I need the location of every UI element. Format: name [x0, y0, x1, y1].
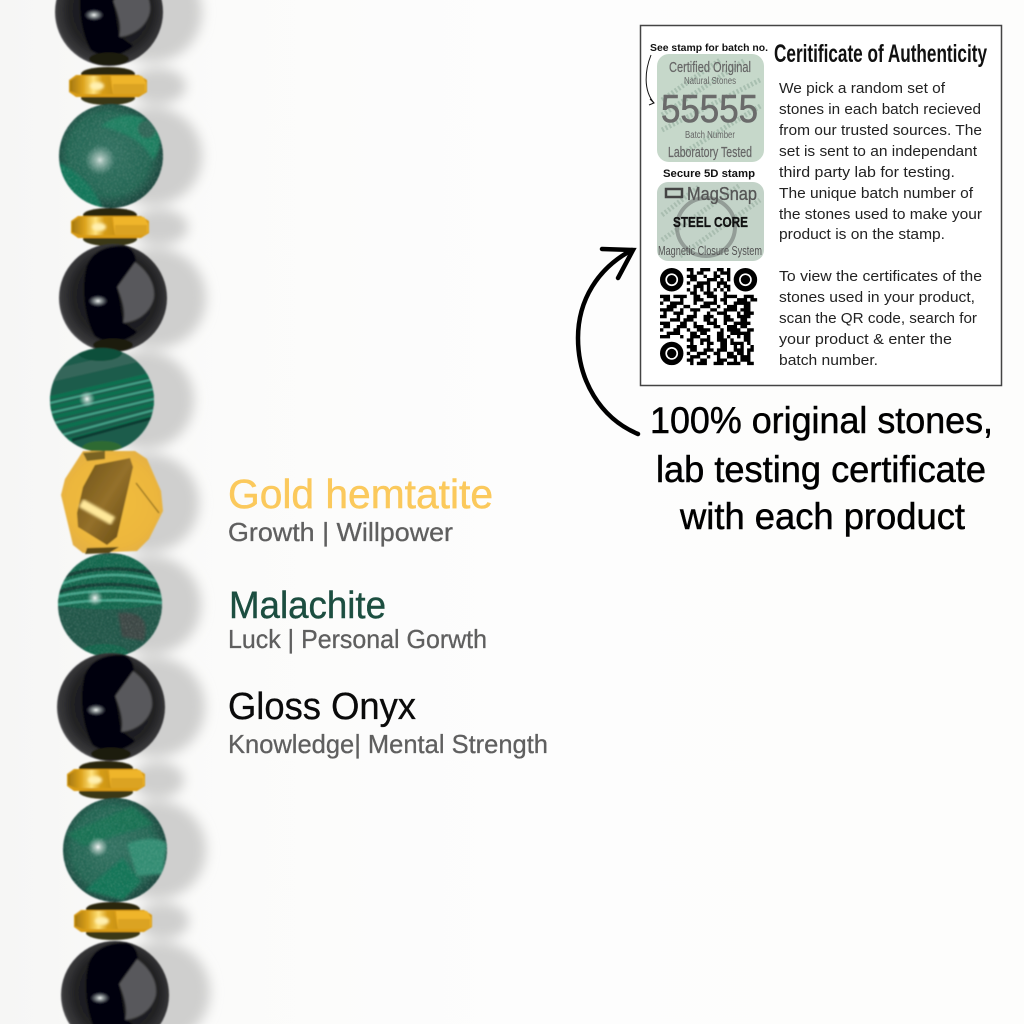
bead: malachite 3 [55, 553, 165, 662]
heading: Gold hemtatite [228, 471, 493, 517]
magsnap name: MagSnap [687, 184, 757, 204]
text: testing description: third party lab for testing. [779, 164, 955, 181]
meaning: Knowledge| Mental Strength [228, 729, 548, 759]
text: testing description: set is sent to an independant [779, 143, 978, 160]
text: how to view [779, 268, 982, 369]
bead: malachite 4 [63, 798, 167, 902]
batch number label: Batch Number [685, 130, 736, 141]
legend: gold hematite [228, 471, 493, 547]
legend: gloss onyx [228, 686, 548, 759]
spacer: gold 2 [71, 208, 149, 246]
text: testing description: the stones used to make your [779, 206, 982, 223]
meaning: Luck | Personal Gorwth [228, 624, 487, 654]
heading: Gloss Onyx [228, 686, 416, 728]
text: how to view: scan the QR code, search for [779, 310, 977, 327]
bead: onyx 1 [55, 0, 163, 66]
bead: malachite 1 [59, 104, 163, 216]
heading: Malachite [229, 585, 386, 627]
text: testing description: product is on the stamp. [779, 226, 945, 243]
text: how to view: stones used in your product, [779, 289, 975, 306]
label: see stamp: See stamp for batch no. [650, 42, 768, 54]
label: secure stamp: Secure 5D stamp [663, 168, 755, 180]
icon: magsnap logo [666, 189, 682, 197]
callout: original stones: 100% original stones, [650, 400, 993, 441]
text: testing description: stones in each batch recieved [779, 101, 981, 118]
text: testing description [779, 80, 982, 243]
steel core: STEEL CORE [673, 214, 748, 231]
spacer: gold 1 [69, 67, 147, 105]
text: how to view: batch number. [779, 352, 878, 369]
icon: small arrow [646, 55, 654, 105]
bead: onyx 3 [57, 653, 165, 761]
text: testing description: from our trusted sources. The [779, 122, 982, 139]
text: testing description: We pick a random set of [779, 80, 946, 97]
bead: onyx 2 [59, 244, 167, 352]
bead strand [50, 0, 169, 1024]
callout: original stones: with each product [679, 496, 966, 537]
lab tested: Laboratory Tested [668, 144, 752, 161]
callout: original stones [650, 400, 993, 537]
spacer: gold 3 [67, 761, 145, 799]
bead shadows [96, 0, 210, 1024]
bead: malachite 2 [50, 345, 154, 455]
spacer: gold 4 [74, 902, 152, 940]
panel: certificate [640, 26, 1002, 386]
text: how to view: To view the certificates of the [779, 268, 982, 285]
legend: malachite [228, 585, 487, 654]
callout: original stones: lab testing certificate [656, 449, 986, 490]
closure system: Magnetic Closure System [658, 243, 762, 258]
meaning: Growth | Willpower [228, 517, 453, 547]
bead: gold hematite [61, 451, 163, 554]
certified text: Certified Original [669, 59, 751, 76]
bead: onyx 4 [61, 941, 169, 1024]
stamp: batch number [657, 54, 764, 162]
text: testing description: The unique batch number of [779, 185, 974, 202]
batch digits: 55555 [661, 88, 758, 131]
natural stones: Natural Stones [684, 76, 736, 87]
stamp: magsnap [657, 182, 764, 261]
text: how to view: your product & enter the [779, 331, 952, 348]
arrow: to certificate [578, 249, 638, 434]
QR code [660, 270, 757, 363]
